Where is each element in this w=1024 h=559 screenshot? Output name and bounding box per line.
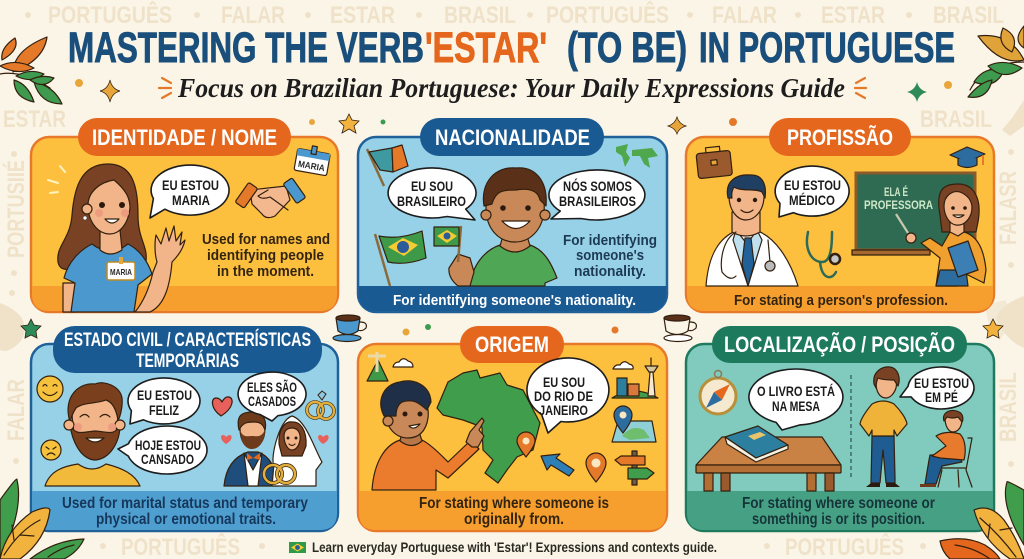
speech bubble: eu sou do rio de janeiro	[527, 358, 609, 433]
icon: compass	[700, 370, 736, 414]
description: For stating where someone is	[419, 495, 609, 512]
title	[68, 25, 955, 72]
icon: orange location pin	[586, 453, 606, 482]
table	[696, 437, 841, 491]
doctor character	[706, 175, 798, 286]
speech bubble: nós somos brasileiros: NÓS SOMOS	[563, 179, 632, 194]
speech bubble: eu sou brasileiro: EU SOU	[411, 179, 453, 194]
description	[62, 495, 308, 528]
speech bubble: eu estou em pé: EU ESTOU	[914, 376, 969, 391]
description: For stating where someone or	[742, 495, 935, 512]
heading pill	[460, 326, 564, 363]
speech bubble: eu estou feliz: FELIZ	[149, 403, 179, 418]
standing man	[860, 367, 907, 487]
description: something is or its position.	[752, 511, 925, 528]
background watermark words: ESTAR	[821, 2, 885, 29]
icons: hearts	[212, 397, 329, 444]
footer text: For stating a person's profession.	[734, 292, 948, 309]
background watermark words: FALAR	[3, 379, 30, 441]
speech bubble: o livro está na mesa: O LIVRO ESTÁ	[757, 384, 835, 399]
background watermark words: BRASIL	[444, 2, 516, 29]
speech bubble: o livro está na mesa: NA MESA	[772, 399, 820, 414]
teacher character	[896, 184, 986, 286]
speech bubble: eu estou médico	[775, 166, 849, 217]
icon: graduation cap	[950, 147, 985, 168]
description: someone's	[576, 248, 644, 264]
boy character	[372, 381, 484, 490]
description: identifying people	[207, 248, 324, 264]
speech bubble: nós somos brasileiros: BRASILEIROS	[559, 194, 636, 209]
background watermark words: FALASR	[995, 171, 1022, 245]
panel: estado civil / características temporárias	[31, 326, 338, 531]
icon: striped flag	[367, 145, 408, 186]
heading pill	[53, 326, 322, 373]
speech bubble: nós somos brasileiros	[549, 170, 645, 220]
footer band	[32, 286, 337, 311]
icon: folded map with pin	[612, 406, 656, 442]
speech bubble: eu estou em pé	[900, 367, 974, 409]
heading pill	[769, 118, 911, 156]
subtitle: Focus on Brazilian Portuguese: Your Daily Expressions Guide	[177, 73, 845, 103]
name tag: MARIA	[110, 267, 132, 277]
speech bubble: eu sou do rio de janeiro: EU SOU	[543, 375, 585, 390]
footer text: For identifying someone's nationality.	[393, 292, 636, 309]
decorative subtitle dashes	[159, 78, 866, 98]
icon: book	[725, 426, 788, 462]
icon: briefcase	[696, 145, 732, 179]
bearded man character	[45, 383, 140, 486]
icon: wedding rings top	[307, 391, 334, 419]
speech bubble: eu estou feliz	[128, 378, 200, 424]
speech bubble: eu sou brasileiro: BRASILEIRO	[397, 194, 466, 209]
description	[742, 495, 935, 528]
decorative leaves: top left	[0, 37, 62, 104]
heading pill: ORIGEM	[475, 332, 549, 357]
background watermark words: BRASIL	[933, 2, 1004, 29]
panel: origem	[358, 326, 667, 531]
speech bubble: eles são casados: CASADOS	[248, 394, 296, 409]
icon: brazil flag small	[434, 226, 461, 262]
description: For identifying	[563, 233, 657, 249]
decorative leaves: bottom right	[940, 482, 1024, 559]
heading pill: PROFISSÃO	[787, 125, 893, 150]
decorative dashed divider	[850, 375, 852, 478]
background watermark words: FALAR	[221, 2, 285, 29]
decorative leaves: bottom left	[0, 479, 84, 559]
heading pill	[712, 326, 967, 363]
heading pill: ESTADO CIVIL / CARACTERÍSTICAS	[64, 329, 311, 351]
footer band	[687, 491, 993, 530]
speech bubble: eu estou maria	[150, 165, 229, 218]
icon: world map	[616, 144, 658, 168]
speech bubble: hoje estou cansado: CANSADO	[141, 452, 194, 467]
icon: brazil flag large	[375, 231, 426, 286]
footer band	[359, 491, 666, 530]
background watermark words: ESTAR	[3, 106, 66, 133]
icon: signpost	[615, 451, 654, 485]
icon: name badge	[294, 143, 331, 176]
speech bubble: eu sou do rio de janeiro: DO RIO DE	[534, 389, 593, 404]
icon: city skyline	[612, 358, 658, 398]
description: nationality.	[574, 264, 646, 280]
arrow	[541, 454, 574, 476]
icon: white coffee cup	[664, 315, 696, 342]
speech bubble: eu estou médico: EU ESTOU	[784, 178, 841, 193]
footer band	[32, 491, 337, 530]
icon: handshake	[235, 178, 306, 218]
background watermark words: PORTUSIIÉ	[2, 160, 30, 258]
speech bubble: eu sou do rio de janeiro: JANEIRO	[539, 403, 588, 418]
blackboard: PROFESSORA	[864, 198, 933, 212]
panel: localização / posição	[686, 326, 994, 531]
decorative leaves: top right	[968, 26, 1024, 97]
couple illustration	[224, 412, 322, 486]
speech bubble: eu estou feliz: EU ESTOU	[137, 388, 192, 403]
background watermark words: BRASIL	[995, 372, 1022, 442]
icon: smiling emoji	[37, 376, 63, 402]
man character	[449, 168, 557, 286]
title: MASTERING THE VERB	[68, 25, 424, 72]
panel: nacionalidade	[358, 118, 667, 312]
speech bubble: eu estou em pé: EM PÉ	[925, 390, 958, 405]
brazil map	[437, 370, 540, 483]
heading pill: LOCALIZAÇÃO / POSIÇÃO	[724, 332, 955, 357]
icon: brazil flag	[289, 542, 306, 553]
description: Used for marital status and temporary	[62, 495, 308, 512]
icon: cloud	[393, 359, 413, 367]
speech bubble: hoje estou cansado: HOJE ESTOU	[135, 438, 201, 453]
heading pill: TEMPORÁRIAS	[136, 350, 239, 372]
icon: map pin on map	[517, 432, 535, 457]
footer band	[687, 286, 993, 311]
speech bubble: eu sou brasileiro	[388, 168, 476, 220]
speech bubble: eu estou maria: MARIA	[172, 193, 210, 208]
icon: tired emoji	[41, 440, 61, 460]
icon: stethoscope	[807, 232, 840, 277]
name tag	[107, 257, 135, 280]
background watermark words: PORTUGUÊS	[546, 1, 669, 29]
footer line: Learn everyday Portuguese with 'Estar'! Expressions and contexts guide.	[312, 539, 717, 555]
footer band	[359, 286, 666, 311]
heading pill: NACIONALIDADE	[435, 125, 590, 150]
speech bubble: hoje estou cansado	[118, 426, 207, 474]
panel: profissão	[686, 118, 994, 312]
heading pill	[420, 118, 604, 156]
blackboard: ELA É	[884, 184, 908, 199]
description	[563, 233, 657, 280]
speech bubble: eu estou maria: EU ESTOU	[162, 178, 219, 193]
icon: wedding rings front	[264, 465, 295, 483]
icon: christ statue	[367, 352, 388, 381]
background watermark words: ESTAR	[330, 2, 395, 29]
description: originally from.	[464, 511, 564, 528]
description: Used for names and	[202, 232, 330, 248]
speech bubble: eu estou médico: MÉDICO	[789, 193, 835, 208]
heading pill: IDENTIDADE / NOME	[92, 125, 277, 150]
description	[202, 232, 330, 280]
description: in the moment.	[217, 264, 314, 280]
blackboard	[852, 173, 975, 255]
panel: identidade / nome	[31, 118, 338, 312]
icon: blue coffee cup	[333, 315, 366, 342]
icon: name badge: MARIA	[297, 159, 326, 173]
title: (TO BE)	[567, 25, 687, 72]
background watermark words: BRASIL	[920, 106, 992, 133]
description: physical or emotional traits.	[96, 511, 276, 528]
decorative sparkles, stars and dots	[21, 79, 1003, 338]
background watermark words: FALAR	[712, 2, 777, 29]
speech bubble: eles são casados: ELES SÃO	[247, 380, 297, 395]
description	[419, 495, 609, 528]
title: 'ESTAR'	[425, 25, 547, 72]
background watermark words: PORTUGUÊS	[48, 1, 172, 29]
heading pill	[78, 118, 291, 156]
woman character	[48, 164, 185, 312]
seated person with chair	[920, 410, 972, 487]
speech bubble: eles são casados	[238, 372, 306, 421]
speech bubble: o livro está na mesa	[749, 369, 843, 430]
